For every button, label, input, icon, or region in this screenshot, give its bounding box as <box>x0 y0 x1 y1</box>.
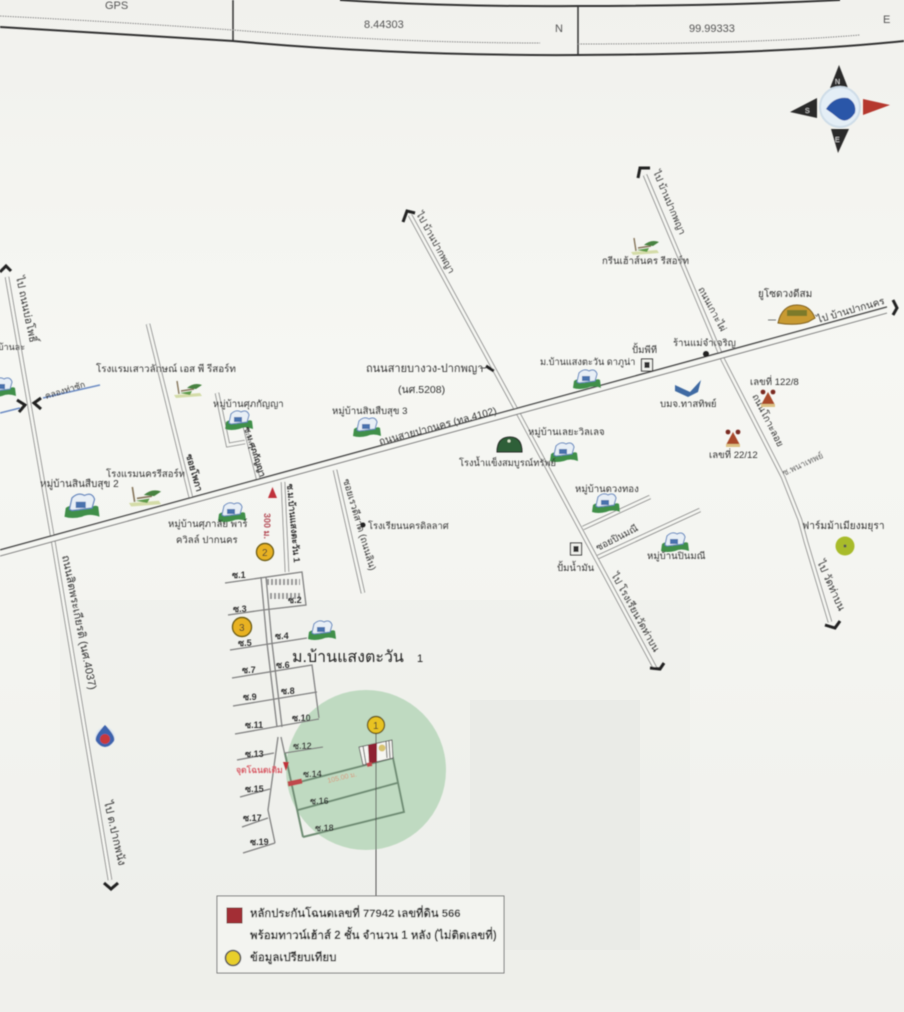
labels along roads: ไป บ้านปากพญา <box>650 168 688 237</box>
legend text: comparison: ข้อมูลเปรียบเทียบ <box>250 951 336 965</box>
soi labels: ซ.11 <box>245 720 263 730</box>
latitude: 8.44303 <box>364 19 404 31</box>
village name: 1 <box>417 653 423 665</box>
road end arrows <box>0 168 897 889</box>
place labels: ปั้มน้ำมัน <box>557 560 595 574</box>
legend text: plot: หลักประกันโฉนดเลขที่ 77942 เลขที่ดิน 566 <box>250 905 461 920</box>
soi labels: ซ.10 <box>292 713 311 723</box>
compass rose <box>790 65 890 153</box>
place labels: ร้านแม่จำเจริญ <box>673 338 736 349</box>
marker 1 <box>368 716 384 734</box>
place labels: โรงเรียนนครดิลลาศ <box>368 520 449 531</box>
soi labels: ซ.9 <box>243 692 257 702</box>
compass rose: S <box>805 108 810 115</box>
place labels: เลขที่ 122/8 <box>750 375 799 388</box>
labels along roads: ซอยโพภา <box>184 453 205 493</box>
north marker: N <box>555 23 563 35</box>
soi labels: ซ.18 <box>315 823 334 833</box>
place labels: โรงแรมนครรีสอร์ท <box>106 468 185 480</box>
labels along roads: ถนนโกาะลอย <box>749 392 786 449</box>
legend swatch: plot <box>227 908 242 923</box>
GPS label: GPS <box>105 0 128 12</box>
faint show-through shapes from the printed page <box>60 600 690 1000</box>
red route <box>268 487 372 784</box>
soi labels: ซ.19 <box>250 837 269 847</box>
east marker: E <box>883 14 890 26</box>
labels along roads: ซ.ม.บ้านแสงตะวัน 1 <box>285 483 302 563</box>
labels along roads: ไป วัดท่าบน <box>814 557 848 613</box>
soi labels: ซ.16 <box>310 796 329 806</box>
place labels: บมจ.ทาสทิพย์ <box>660 398 717 410</box>
resort icons <box>129 238 659 506</box>
soi labels: ซ.17 <box>243 813 262 823</box>
place labels: หมู่บ้านศุภาลัย พาร์ <box>168 518 248 530</box>
property marker <box>359 734 393 896</box>
marker 3 <box>232 618 252 636</box>
route distance: 105.00 ม. <box>327 771 358 785</box>
soi labels: ซ.1 <box>232 570 246 580</box>
soi labels: ซ.13 <box>245 749 264 759</box>
comparison zone circle <box>286 690 446 850</box>
labels along roads: คลองท่าซัก <box>44 379 86 401</box>
route label: จุดโฉนดเดิม <box>236 764 283 776</box>
marker 2 <box>256 544 274 560</box>
GPS table <box>0 0 904 55</box>
place labels: หมู่บ้านสินสืบสุข 2 <box>40 478 119 490</box>
village name: ม.บ้านแสงตะวัน <box>292 649 404 666</box>
labels along roads: ซอยปินมณี <box>594 522 640 554</box>
labels along roads: ซอยเรวดีสาด (ถนนลิน) <box>340 477 379 572</box>
house icons <box>0 370 689 640</box>
soi labels: ซ.15 <box>245 784 264 794</box>
place labels: กรีนเฮ้าส์นคร รีสอร์ท <box>602 255 689 267</box>
place labels: ยูโซดวงดีสม <box>758 287 812 300</box>
labels along roads: ไป บ้านปากพญา <box>413 209 457 276</box>
place labels: ปั้มพีที <box>632 342 657 356</box>
compass rose: N <box>835 79 840 86</box>
labels along roads <box>13 168 887 867</box>
compass rose: E <box>835 137 840 144</box>
soi labels: ซ.5 <box>238 638 252 648</box>
place labels: ถนนสายบางวง-ปากพญา <box>366 363 483 375</box>
place labels: เลขที่ 22/12 <box>709 448 758 461</box>
place labels: ฟาร์มม้าเมียงมยุรา <box>802 520 885 532</box>
legend swatch: comparison <box>226 950 240 966</box>
labels along roads: ซ.พนาเทพย์ <box>781 450 825 478</box>
labels along roads: ไป โรงเรียนวัดท่าบน <box>608 569 663 654</box>
roads network <box>0 175 887 880</box>
place labels: หมู่บ้านศุภกัญญา <box>213 399 284 410</box>
soi labels: ซ.2 <box>288 595 302 605</box>
place labels: โรงน้ำแข็งสมบูรณ์ทรัพย์ <box>459 456 556 469</box>
place labels: หมู่บ้านสินสืบสุข 3 <box>332 405 407 417</box>
longitude: 99.99333 <box>689 23 735 35</box>
soi labels <box>232 570 334 847</box>
300 m distance: 300 ม. <box>262 513 272 539</box>
marker 3: 3 <box>239 623 245 634</box>
soi labels: ซ.12 <box>293 741 312 751</box>
soi labels: ซ.6 <box>276 660 290 670</box>
labels along roads: ไป บ้านปากนคร <box>815 295 887 326</box>
labels along roads: ถนนเกาะไผ่ <box>695 285 729 334</box>
legend box <box>217 896 504 973</box>
place labels: โรงแรมเสาวลักษณ์ เอส พี รีสอร์ท <box>96 363 236 375</box>
labels along roads: ซ.ม.ศุภกัญญา <box>241 426 268 479</box>
place labels: หมู่บ้านเลยะวิลเลจ <box>528 427 605 438</box>
labels along roads: ถนนสิตพระเกียรติ (นศ.4037) <box>59 554 99 691</box>
soi labels: ซ.8 <box>281 686 295 696</box>
soi labels: ซ.7 <box>242 665 256 675</box>
marker 2: 2 <box>262 548 268 559</box>
soi labels: ซ.3 <box>233 604 247 614</box>
place labels: (นศ.5208) <box>398 384 445 396</box>
soi labels: ซ.14 <box>303 769 322 779</box>
labels along roads: ถนนสายปากนคร (ทล.4102) <box>378 406 498 448</box>
icon: PTT station <box>95 725 115 747</box>
labels along roads: ไป ถนนบ่อโพธิ์ <box>13 274 42 345</box>
place labels <box>0 255 885 574</box>
soi labels: ซ.4 <box>275 631 289 641</box>
labels along roads: ไป ต.ปากพนัง <box>101 799 129 867</box>
small map icons <box>360 305 854 556</box>
place labels: หมู่บ้านปินมณี <box>647 550 706 562</box>
legend text: townhouse: พร้อมทาวน์เฮ้าส์ 2 ชั้น จำนวน 1 หลัง (ไม่ติดเลขที่) <box>250 926 497 942</box>
place labels: ควิลล์ ปากนคร <box>176 534 238 546</box>
marker 1: 1 <box>373 721 379 732</box>
village soi grid <box>225 572 404 853</box>
place labels: ม.บ้านแสงตะวัน ดาภูน่า <box>540 357 635 368</box>
place labels: หมู่บ้านดวงทอง <box>575 484 639 495</box>
